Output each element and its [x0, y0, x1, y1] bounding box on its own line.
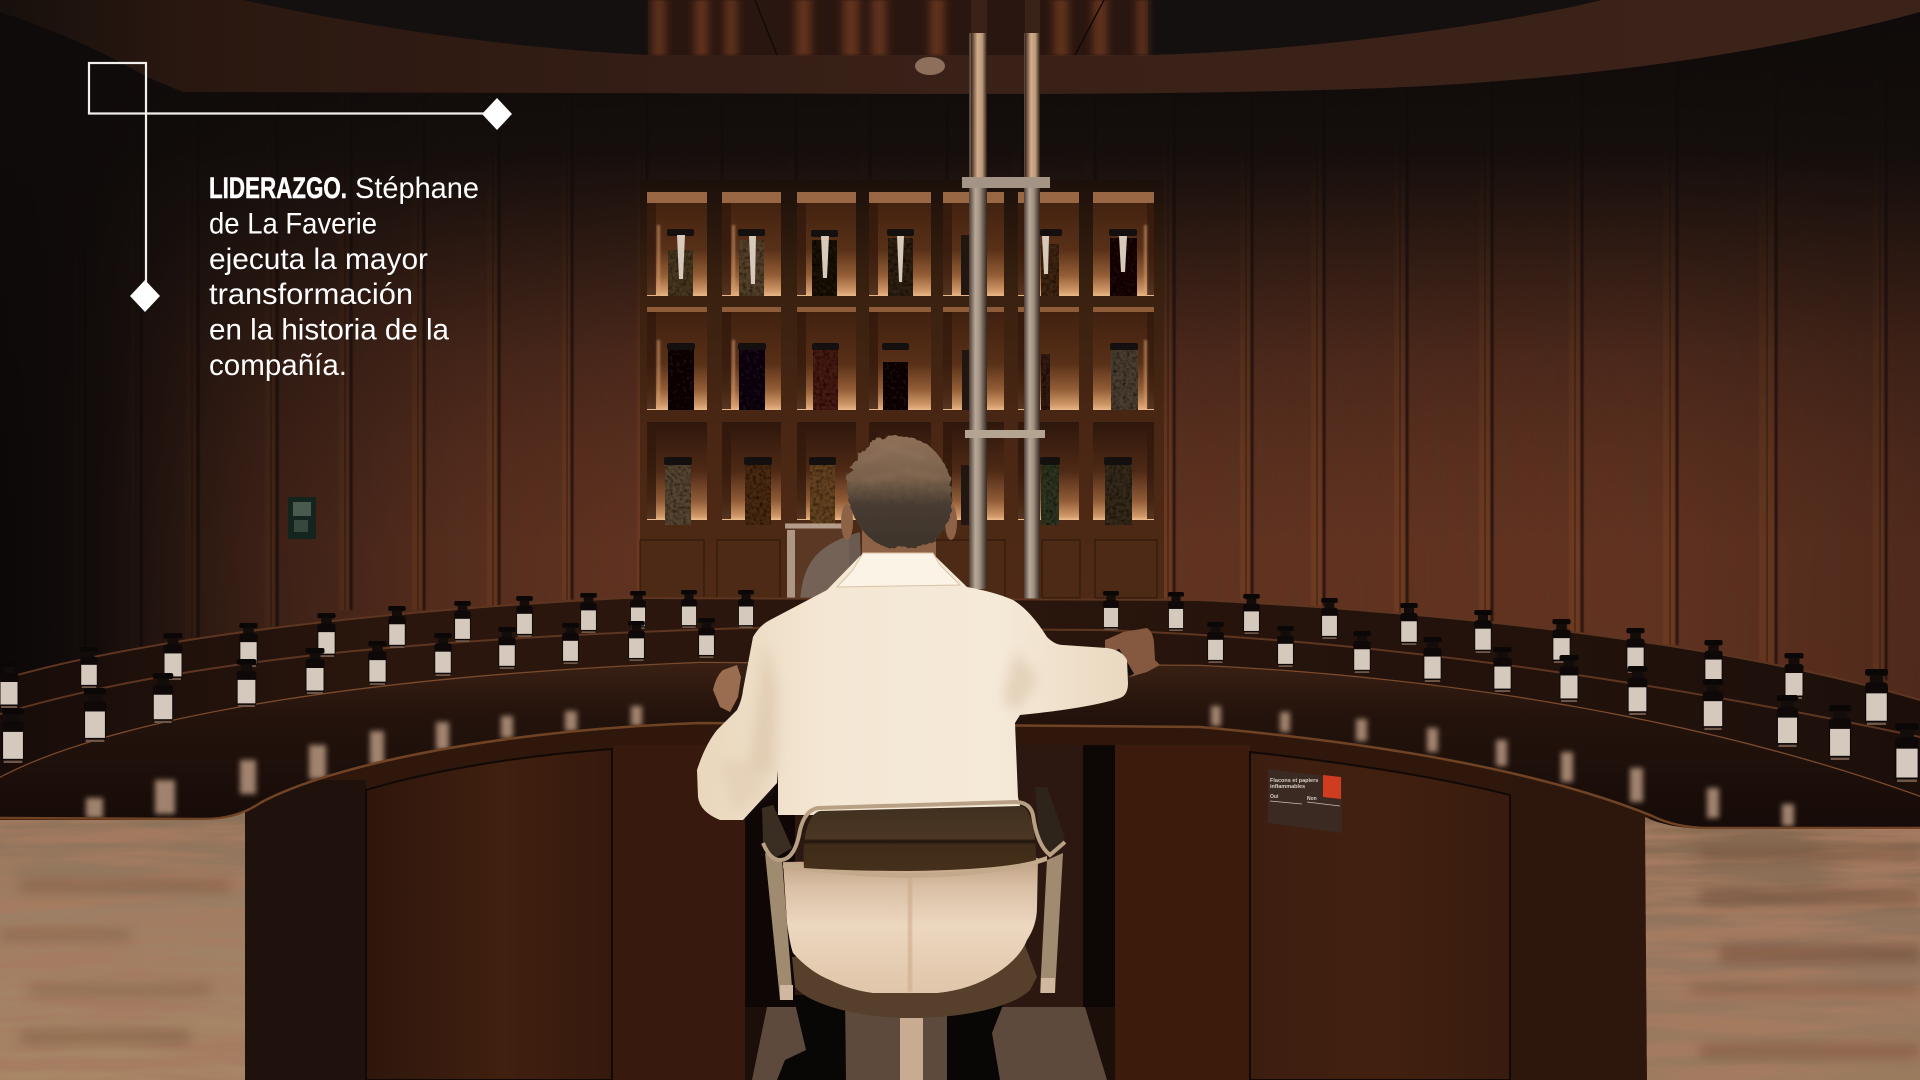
diamond end right: [482, 98, 512, 130]
jars row 1: [667, 229, 1137, 296]
travertine block left: [0, 810, 250, 1080]
glossy counter top: [0, 663, 1920, 828]
chair frame: [763, 802, 1065, 860]
jars partly behind pipes: [961, 235, 972, 525]
niches row 1: [647, 192, 1154, 296]
front lip highlight: [0, 723, 1920, 828]
diamond end bottom: [130, 280, 160, 312]
head: [841, 436, 957, 561]
smoke detector: [915, 57, 945, 75]
coat collar: [837, 553, 960, 587]
counter reflections: [86, 706, 1794, 826]
caption text: [209, 172, 479, 382]
caption text: transformación: [209, 278, 413, 311]
backrest pad: [804, 806, 1036, 871]
caption text: de La Faverie: [209, 208, 377, 240]
chair seat: [792, 940, 1037, 1018]
glass-lit shelf: [640, 180, 1164, 600]
perfume bottles: [0, 590, 1919, 782]
warning plaque: Flacons et papiers: [1270, 778, 1318, 784]
right hand and watch: [1105, 628, 1160, 677]
caption text: LIDERAZGO.: [209, 172, 347, 205]
niches row 2: [647, 307, 1154, 410]
caption text: en la historia de la: [209, 314, 450, 346]
warning plaque: inflammables: [1270, 784, 1305, 790]
warning plaque: Oui: [1270, 794, 1279, 800]
chair armrests: [762, 805, 792, 858]
glass display box: [785, 523, 862, 603]
organ counter: [0, 590, 1920, 1080]
neck and ears: [841, 504, 957, 561]
travertine block right: [1640, 810, 1920, 1080]
niche dark side walls: [647, 203, 1154, 519]
jars row 3: [664, 457, 1132, 525]
rack shelf edges: [0, 598, 1920, 797]
ceiling central lit slats: [648, 0, 1148, 55]
legs and shoes: [777, 995, 1007, 1080]
white lab coat: [697, 553, 1128, 993]
coat lower back: [783, 858, 1038, 993]
wood wall: [0, 0, 1920, 720]
caption text: ejecuta la mayor: [209, 243, 428, 276]
left hand: [713, 665, 741, 712]
ceiling: [0, 0, 1920, 94]
side light strips: [657, 225, 1147, 408]
left door: [366, 749, 612, 1080]
warning plaque: [1268, 769, 1342, 833]
warning plaque: Non: [1307, 796, 1317, 802]
exit sign: [288, 497, 316, 539]
chair backrest and frame: [762, 787, 1065, 1000]
shelf frame: [640, 180, 1164, 600]
vertical steel pipes: [962, 0, 1063, 642]
coat centre seam: [908, 875, 912, 992]
front panels: [0, 715, 1650, 1080]
rack face: [0, 598, 1920, 800]
lower cabinet panels: [640, 540, 1157, 598]
right door: [1250, 752, 1510, 1080]
coat shading: [720, 640, 1038, 815]
caption text: compañía.: [209, 349, 347, 382]
callout connector: square with two diamond-tipped lines: [89, 63, 512, 312]
jars row 2: [667, 343, 1138, 410]
niches row 3: [647, 422, 1154, 520]
recess under counter: [745, 745, 1115, 1080]
chair stem: [900, 1018, 923, 1080]
hair: [847, 436, 952, 548]
caption text: Stéphane: [355, 172, 479, 205]
chair legs: [765, 853, 793, 1000]
herb jars: [664, 229, 1138, 525]
perfumer seated from behind: [697, 436, 1160, 1080]
